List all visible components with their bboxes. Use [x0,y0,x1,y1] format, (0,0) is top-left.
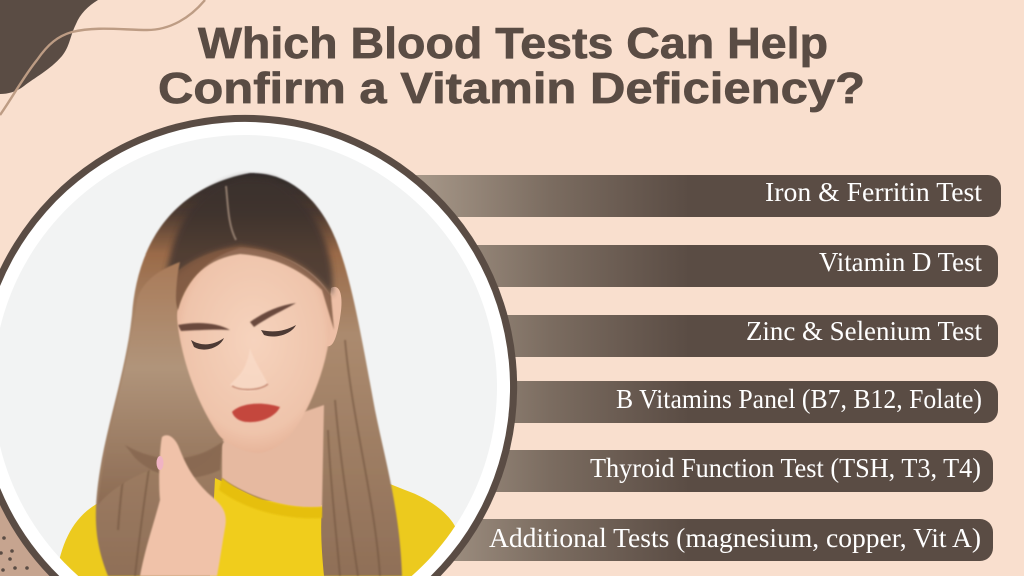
hair at the temple [168,247,334,330]
front hair lock [98,262,224,505]
eyes [191,325,296,350]
decorative corner blob [0,0,98,94]
title [158,19,865,113]
bar: additional tests [380,519,993,561]
back hair [96,173,402,576]
centre of shirt [210,478,324,576]
eyebrows [178,303,296,331]
parting [226,186,236,240]
bar: vitamin D: Vitamin D Test [819,247,982,277]
bar: thyroid [380,450,993,492]
hair strands [117,340,381,576]
bar: vitamin D [380,245,998,287]
bar: additional tests: Additional Tests (magnesium, copper, Vit A) [489,523,981,553]
bar: B vitamins: B Vitamins Panel (B7, B12, Folate) [616,384,982,414]
collar [219,478,322,518]
bar: thyroid: Thyroid Function Test (TSH, T3, T4) [590,453,981,483]
face [176,248,331,453]
bar: zinc and selenium: Zinc & Selenium Test [746,316,982,346]
bar: B vitamins [380,381,998,423]
title: Confirm a Vitamin Deficiency? [158,64,865,113]
dark hair at the roots [164,176,333,296]
lips [232,404,280,422]
title: Which Blood Tests Can Help [198,19,828,68]
bar: zinc and selenium [380,315,998,357]
circular photo frame [0,115,517,576]
neck [222,405,324,507]
bar: iron and ferritin [380,175,1001,217]
twisted hair [125,442,222,478]
yellow shirt [56,482,470,576]
dotted corner patch [0,495,58,576]
bar: iron and ferritin: Iron & Ferritin Test [765,177,983,207]
decorative curved line [0,0,205,115]
hand [140,435,226,576]
test bars list [380,175,1001,561]
ear [326,287,342,346]
fingernail [156,456,164,470]
nose [230,352,267,388]
photo: woman examining her hair [0,130,510,576]
